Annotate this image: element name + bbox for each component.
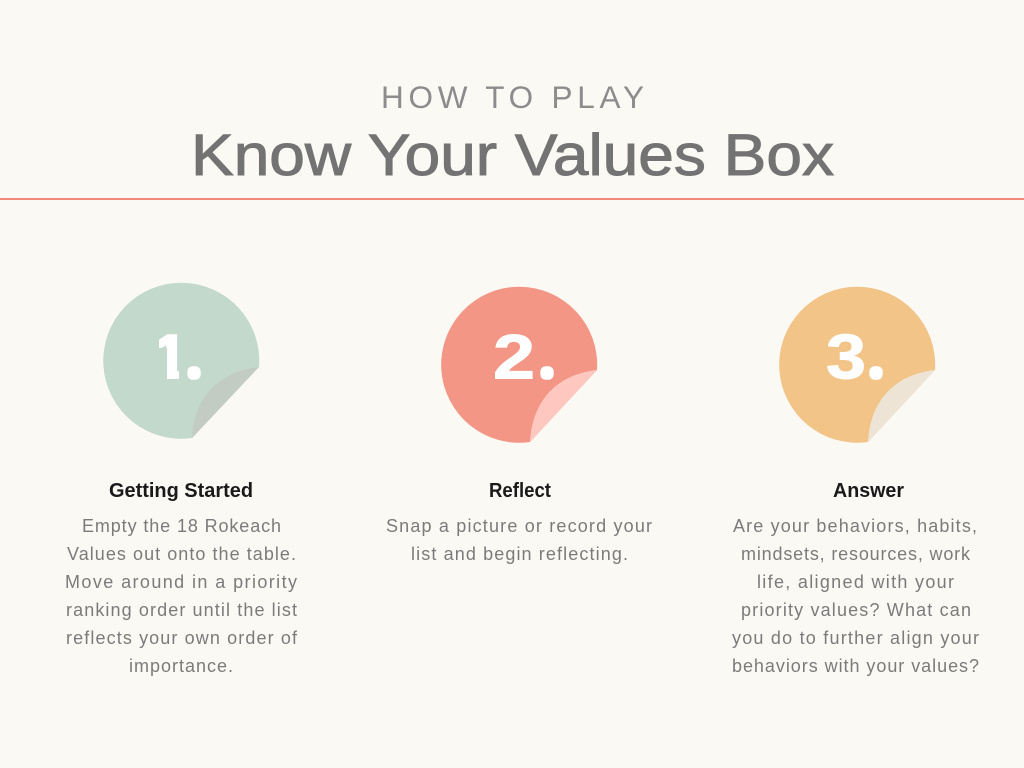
icon: sticker 1 bbox=[103, 283, 259, 439]
text block: reflect instructions: Snap a picture or record your bbox=[386, 516, 652, 536]
text block: answer instructions: Are your behaviors, habits, bbox=[733, 516, 977, 536]
icon: sticker 1: . bbox=[191, 357, 197, 379]
icon: sticker 2: 2 bbox=[493, 322, 535, 392]
heading: getting started: Getting Started bbox=[109, 480, 253, 502]
subtitle: how to play: HOW TO PLAY bbox=[381, 79, 644, 115]
text block: getting started instructions: ranking order until the list bbox=[66, 600, 297, 620]
text block: answer instructions: behaviors with your values? bbox=[732, 656, 979, 676]
text block: answer instructions: you do to further align your bbox=[732, 628, 979, 648]
text block: answer instructions: life, aligned with your bbox=[757, 572, 954, 592]
panel: step 2 reflect bbox=[386, 287, 652, 564]
text block: getting started instructions: importance. bbox=[129, 656, 233, 676]
heading: reflect: Reflect bbox=[489, 480, 551, 502]
text block: answer instructions: mindsets, resources, work bbox=[741, 544, 971, 564]
text block: reflect instructions bbox=[386, 516, 652, 564]
heading: answer: Answer bbox=[833, 480, 904, 502]
text block: getting started instructions: Values out onto the table. bbox=[67, 544, 296, 564]
text block: getting started instructions bbox=[65, 516, 298, 676]
title: know your values box: Know Your Values Box bbox=[191, 123, 834, 188]
text block: answer instructions: priority values? What can bbox=[741, 600, 971, 620]
icon: sticker 2: . bbox=[544, 357, 550, 379]
icon: sticker 3 bbox=[779, 287, 935, 443]
panel: step 1 getting started bbox=[65, 283, 298, 676]
text block: reflect instructions: list and begin reflecting. bbox=[411, 544, 628, 564]
text block: getting started instructions: Empty the 18 Rokeach bbox=[82, 516, 281, 536]
icon: sticker 2 bbox=[441, 287, 597, 443]
text block: getting started instructions: reflects your own order of bbox=[66, 628, 298, 648]
panel: step 3 answer bbox=[732, 287, 979, 676]
text block: answer instructions bbox=[732, 516, 979, 676]
text block: getting started instructions: Move around in a priority bbox=[65, 572, 297, 592]
icon: sticker 3: . bbox=[873, 357, 879, 379]
icon: sticker 1: 1 bbox=[152, 323, 188, 393]
icon: sticker 3: 3 bbox=[826, 322, 866, 392]
